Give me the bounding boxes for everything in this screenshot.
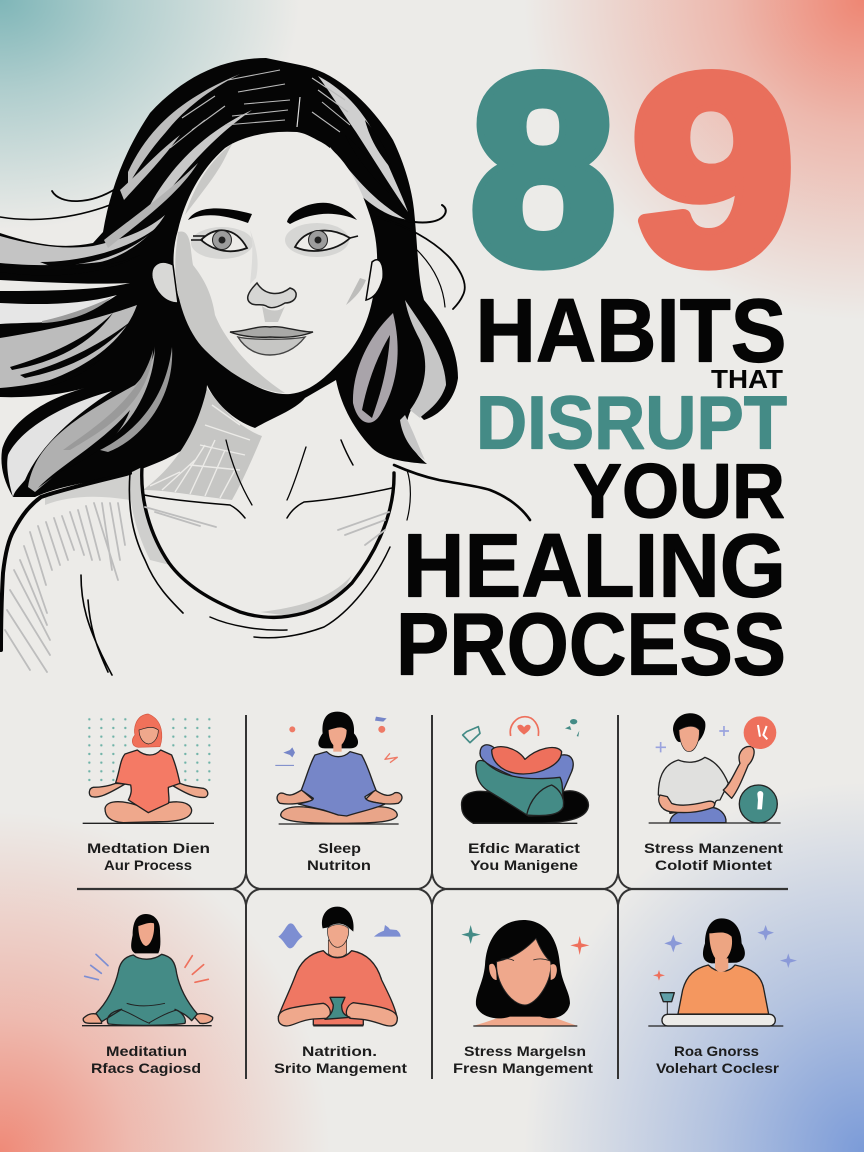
panel: habit 8 xyxy=(648,918,797,1076)
title line: process: PROCESS xyxy=(396,594,786,694)
crown hair highlights xyxy=(104,70,410,248)
label: Aur Process xyxy=(104,857,192,873)
label: Srito Mangement xyxy=(274,1060,407,1076)
right eye xyxy=(295,230,358,251)
shirt panel shadow xyxy=(130,467,170,565)
nose xyxy=(248,283,296,308)
digit 8: 8 xyxy=(471,22,615,318)
title line: your: YOUR xyxy=(573,448,785,534)
title line: healing: HEALING xyxy=(403,516,786,616)
dot pattern xyxy=(83,715,213,783)
neck hatching xyxy=(150,405,250,498)
label xyxy=(274,1043,407,1076)
illustration: woman portrait xyxy=(0,58,530,675)
flyaway strands xyxy=(0,188,465,465)
icon: meditating woman blue xyxy=(275,712,402,824)
shoulder band shadow xyxy=(45,473,130,505)
icon: serene face xyxy=(461,920,589,1026)
title line: habits: HABITS xyxy=(476,282,786,382)
label: Fresn Mangement xyxy=(453,1060,593,1076)
big number xyxy=(471,22,794,318)
lips xyxy=(230,327,313,355)
icon: meditating woman coral xyxy=(83,714,214,823)
label xyxy=(307,840,371,873)
face xyxy=(174,132,377,394)
label: Stress Margelsn xyxy=(464,1043,586,1059)
collarbones and neck lines xyxy=(144,440,410,520)
habit grid lines xyxy=(77,715,788,1079)
title xyxy=(396,282,787,694)
panel: habit 6 xyxy=(274,907,407,1076)
neck shadow xyxy=(143,388,262,500)
panel: habit 1 xyxy=(83,714,214,873)
panel: habit 2 xyxy=(275,712,402,873)
label: Natrition. xyxy=(302,1043,377,1059)
digit 9: 9 xyxy=(632,22,794,318)
left eye xyxy=(191,230,247,251)
panel: habit 5 xyxy=(82,914,213,1076)
eyebrows xyxy=(188,203,357,224)
label: Sleep xyxy=(318,840,361,856)
label: Rfacs Cagiosd xyxy=(91,1060,201,1076)
label: Efdic Maratict xyxy=(468,840,580,856)
panel: habit 4 xyxy=(644,713,783,873)
title line: disrupt: DISRUPT xyxy=(476,380,787,464)
icon: meditating person teal xyxy=(82,914,213,1026)
panel: habit 7 xyxy=(453,920,593,1076)
panel: habit 3 xyxy=(462,717,588,873)
icon: person at table xyxy=(648,918,797,1026)
hair silhouette xyxy=(0,58,458,497)
shirt hatching xyxy=(5,503,389,672)
left hair highlights xyxy=(0,215,172,497)
shoulder lines xyxy=(1,465,530,675)
label: Colotif Miontet xyxy=(655,857,772,873)
label xyxy=(91,1043,201,1076)
label xyxy=(468,840,580,873)
shirt neckline xyxy=(129,467,394,638)
label: Medtation Dien xyxy=(87,840,210,856)
right hair lock highlights xyxy=(353,300,446,460)
title line: that: THAT xyxy=(711,364,783,394)
label: You Manigene xyxy=(470,857,578,873)
face shading xyxy=(175,143,366,393)
icon: person with alert bubble xyxy=(649,713,781,823)
left ear xyxy=(152,262,178,303)
label: Meditatiun xyxy=(106,1043,187,1059)
label: Stress Manzenent xyxy=(644,840,783,856)
icon: person with cup xyxy=(278,907,401,1026)
label: Volehart Coclesr xyxy=(656,1060,780,1076)
collar shadow xyxy=(260,575,352,616)
label xyxy=(453,1043,593,1076)
label: Nutriton xyxy=(307,857,371,873)
label xyxy=(87,840,210,873)
label xyxy=(644,840,783,873)
icon: folded cloth heart xyxy=(462,717,588,823)
right ear xyxy=(366,260,383,300)
label xyxy=(656,1043,780,1076)
label: Roa Gnorss xyxy=(674,1043,759,1059)
